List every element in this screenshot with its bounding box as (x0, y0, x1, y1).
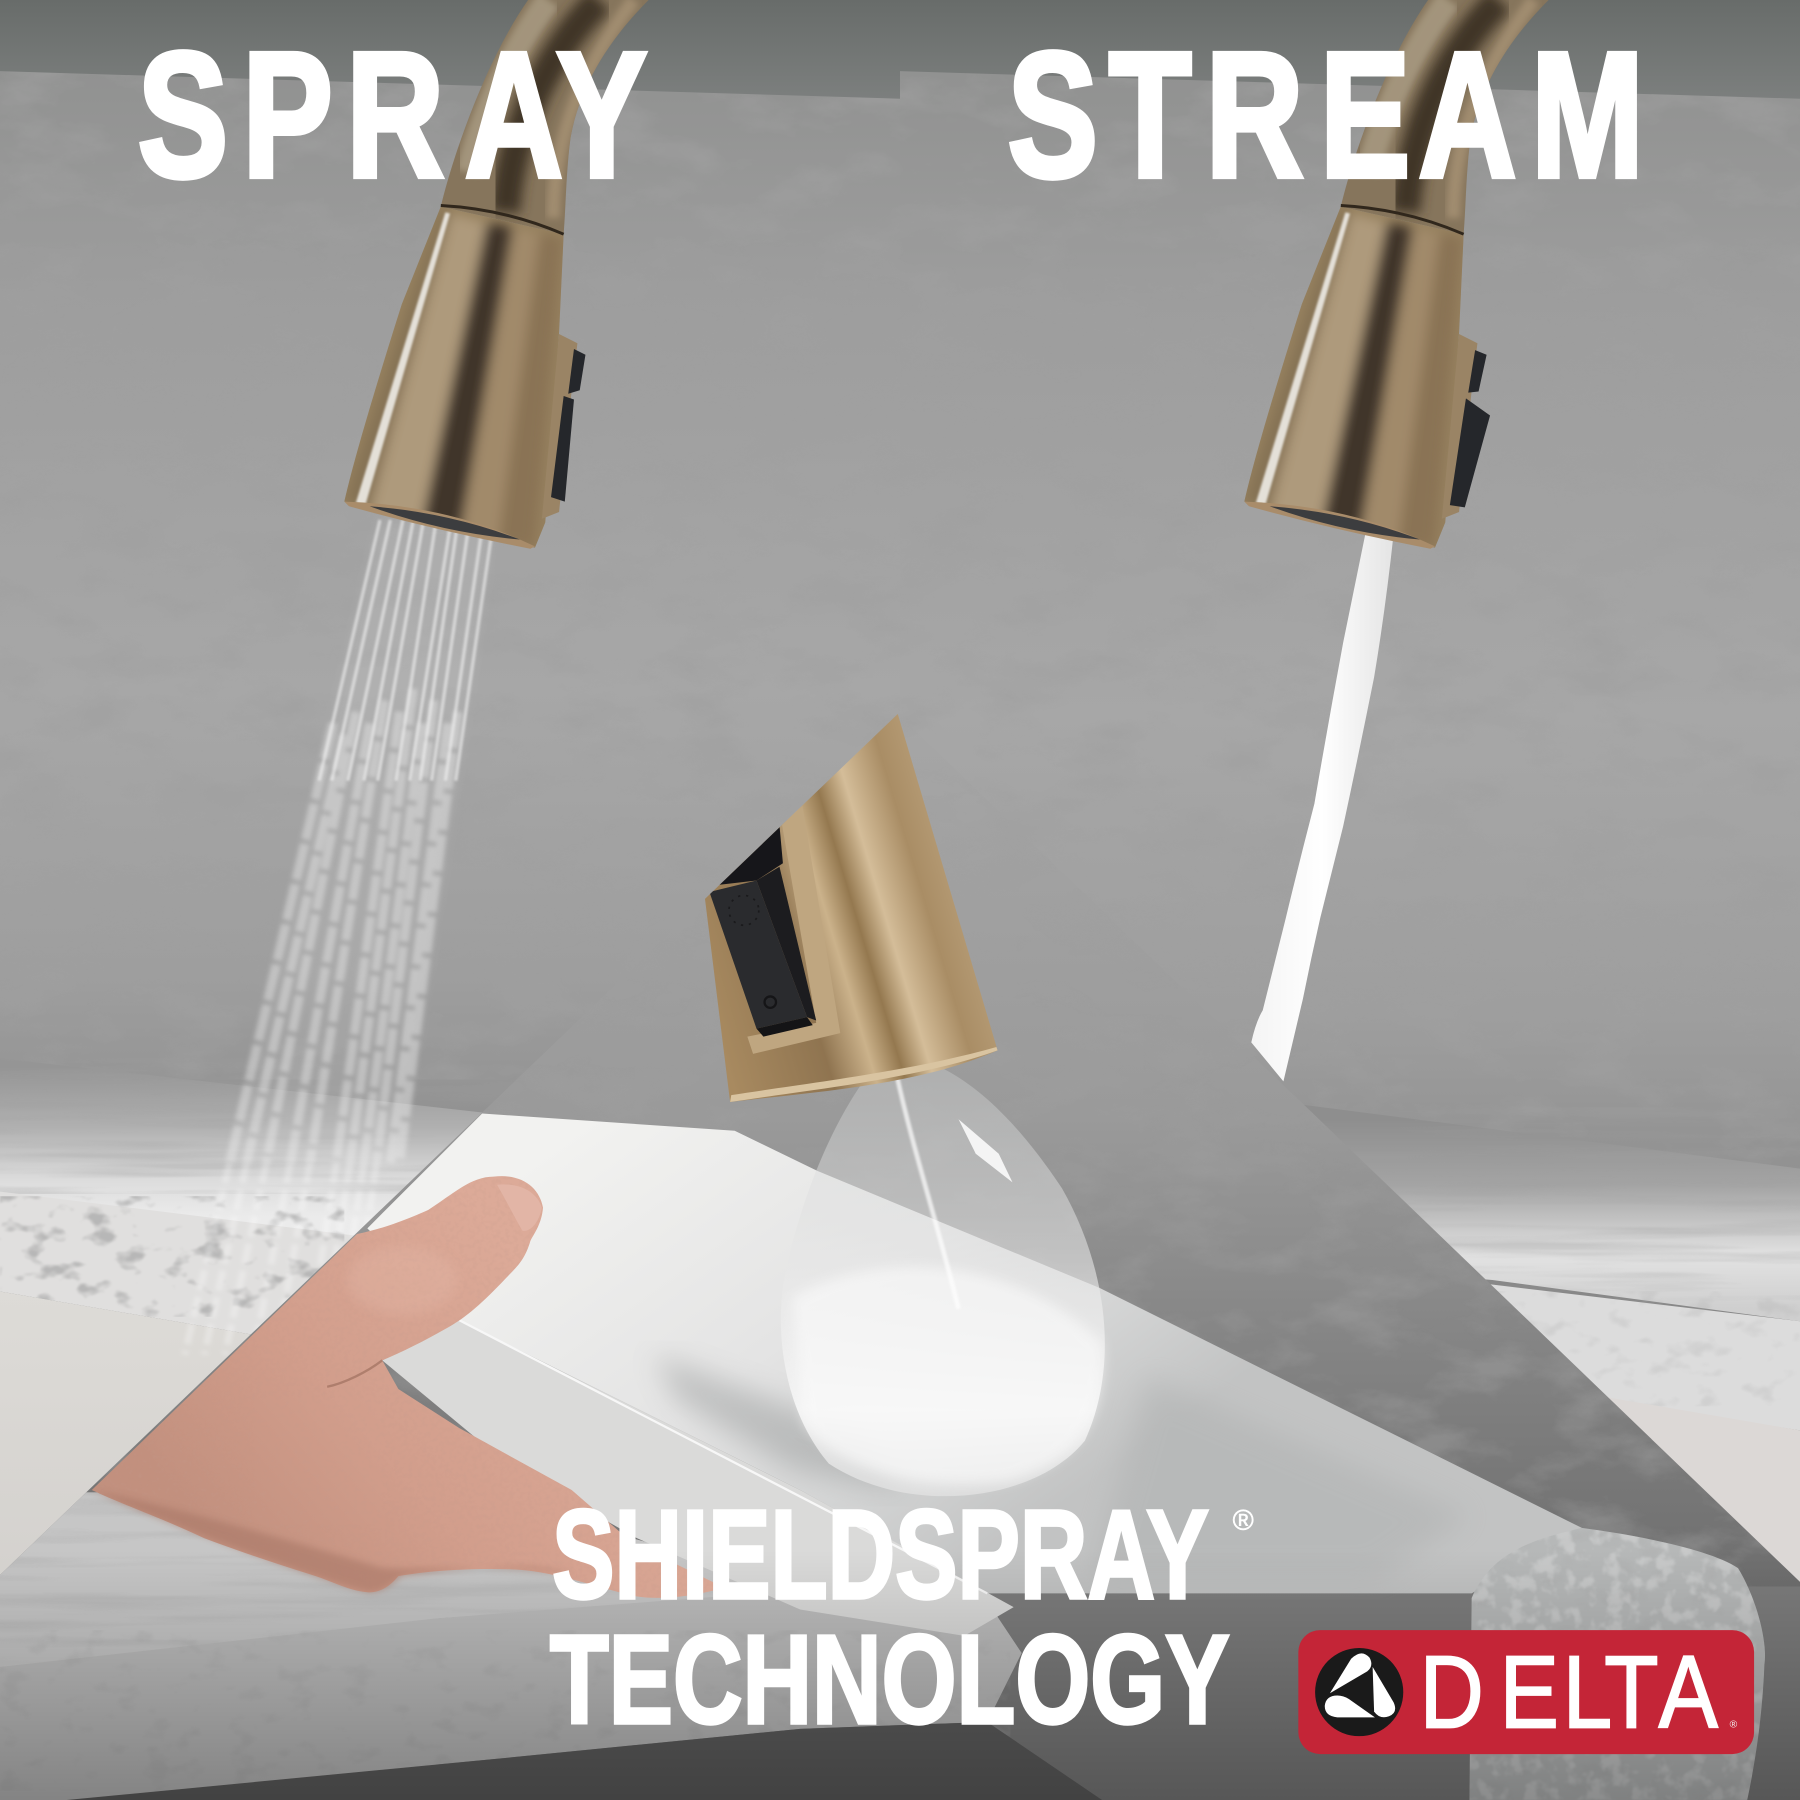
counter front edge (1490, 1284, 1800, 1430)
counter surface (1306, 1106, 1800, 1322)
button side (757, 867, 816, 1021)
ceiling band (0, 0, 900, 99)
panel: shieldspray photo (0, 706, 1800, 1800)
hand (92, 1176, 729, 1601)
heading: SPRAY: SPRAY (138, 16, 647, 214)
marble counter front (0, 1590, 1022, 1800)
black button (709, 880, 807, 1029)
panel: spray photo (0, 0, 900, 1800)
logo: Delta badge: ® (1730, 1720, 1738, 1731)
faucet: spray mode (344, 0, 649, 549)
wordmark: DELTA (1420, 1635, 1719, 1750)
heading: SHIELDSPRAY TECHNOLOGY (550, 1484, 1254, 1750)
counter surface (0, 1085, 482, 1236)
button housing (1442, 334, 1477, 519)
panel: stream photo (900, 0, 1800, 1582)
heading: SHIELDSPRAY TECHNOLOGY: ® (1233, 1505, 1254, 1537)
wall: concrete (0, 0, 900, 1148)
ceiling band (900, 0, 1800, 99)
heading: SHIELDSPRAY TECHNOLOGY: TECHNOLOGY (550, 1609, 1229, 1750)
logo: Delta badge (1298, 1630, 1754, 1754)
black toggle upper (568, 349, 585, 394)
black toggle lower (1450, 398, 1490, 507)
counter front edge (0, 1192, 354, 1334)
button bezel (747, 806, 840, 1054)
stream of water (1251, 530, 1394, 1081)
sink basin (0, 1291, 436, 1800)
white tray top (367, 1114, 1582, 1593)
black toggle upper (1468, 350, 1487, 393)
tray front edge (382, 1320, 1014, 1636)
button dots (729, 895, 759, 925)
spray head close-up (705, 706, 998, 1102)
water spill over tray corner (1446, 1521, 1774, 1800)
wall: concrete (0, 1085, 1800, 1586)
button shadow (716, 825, 783, 885)
faucet: stream mode (1244, 0, 1549, 549)
water bulb (781, 1068, 1105, 1496)
bottom vignette (0, 1550, 1800, 1800)
sink basin (1612, 1400, 1800, 1582)
lower marble surface (0, 1492, 738, 1666)
dark floor strip (67, 1722, 1102, 1800)
icon: Delta triangle mark (1315, 1648, 1403, 1736)
sink and dark base (990, 1586, 1800, 1800)
wall: concrete (900, 0, 1800, 1194)
spray water strands (185, 520, 494, 1355)
heading: SHIELDSPRAY TECHNOLOGY: SHIELDSPRAY (552, 1484, 1209, 1625)
black toggle lower (551, 396, 574, 502)
button housing (542, 334, 577, 519)
heading: STREAM: STREAM (1008, 16, 1644, 214)
